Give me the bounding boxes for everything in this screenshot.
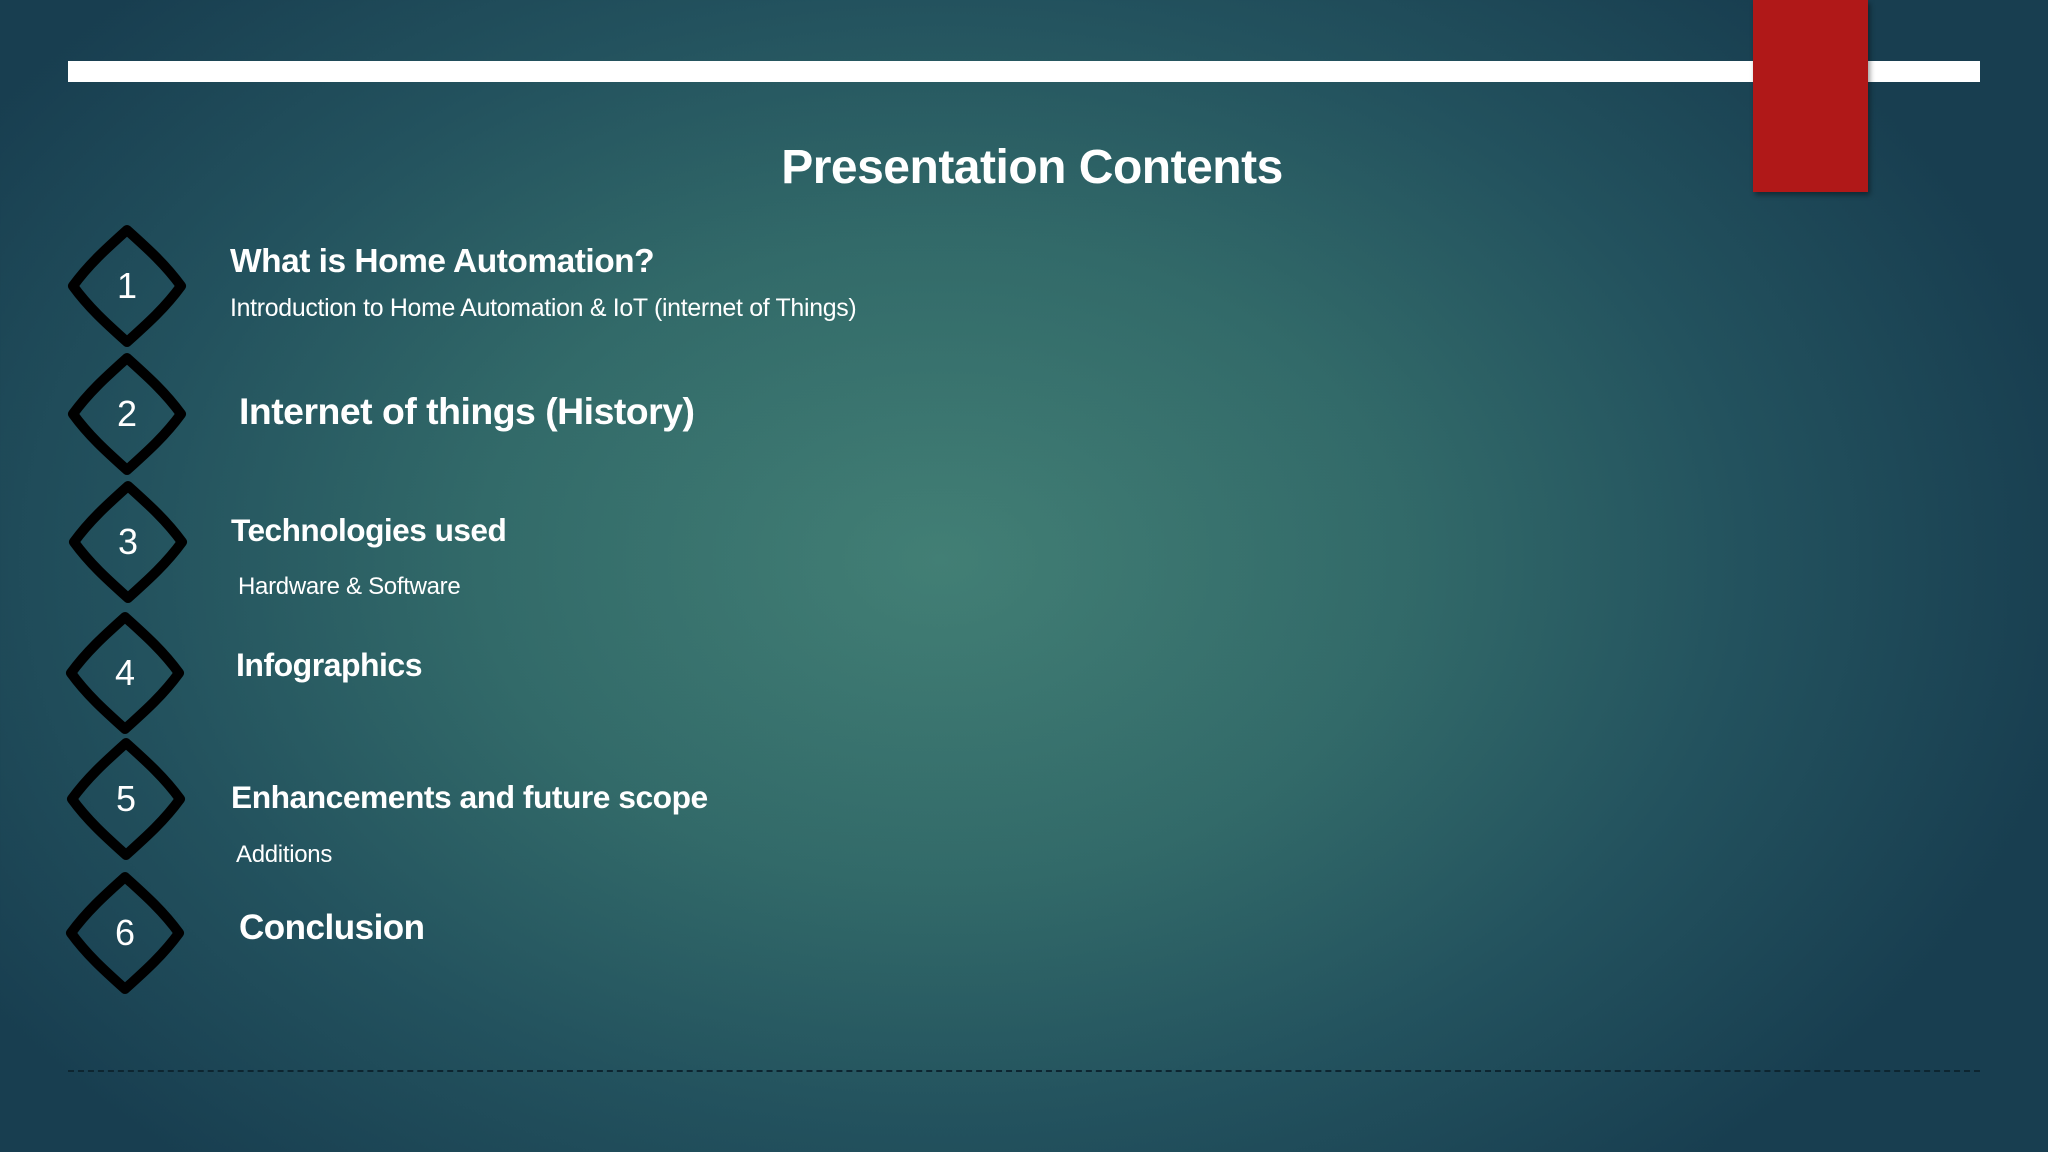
icon: diamond 5 (66, 738, 186, 860)
item 1 (68, 225, 856, 347)
subtext: Hardware & Software (238, 573, 460, 600)
red accent bookmark (1753, 0, 1868, 192)
item 6 (66, 872, 425, 994)
title: Presentation Contents (781, 141, 1283, 194)
item 3 (68, 481, 506, 603)
icon: diamond 2 (68, 353, 186, 475)
heading: Internet of things (History) (239, 390, 694, 432)
item 2 (68, 353, 694, 475)
heading: Enhancements and future scope (231, 779, 708, 815)
icon: diamond 3: 3 (118, 521, 138, 562)
heading: Technologies used (231, 512, 506, 548)
subtext: Additions (236, 841, 332, 868)
subtext: Introduction to Home Automation & IoT (internet of Things) (230, 294, 856, 322)
icon: diamond 5: 5 (116, 778, 136, 819)
heading: Infographics (236, 647, 422, 683)
icon: diamond 3 (68, 481, 188, 603)
item 4 (66, 612, 422, 734)
icon: diamond 6 (66, 872, 184, 994)
icon: diamond 4 (66, 612, 184, 734)
icon: diamond 6: 6 (115, 912, 135, 953)
icon: diamond 2: 2 (117, 393, 137, 434)
icon: diamond 4: 4 (115, 652, 135, 693)
heading: Conclusion (239, 908, 425, 947)
top white bar (68, 61, 1980, 82)
item 5 (66, 738, 708, 868)
icon: diamond 1: 1 (117, 265, 137, 306)
heading: What is Home Automation? (230, 243, 654, 280)
icon: diamond 1 (68, 225, 186, 347)
